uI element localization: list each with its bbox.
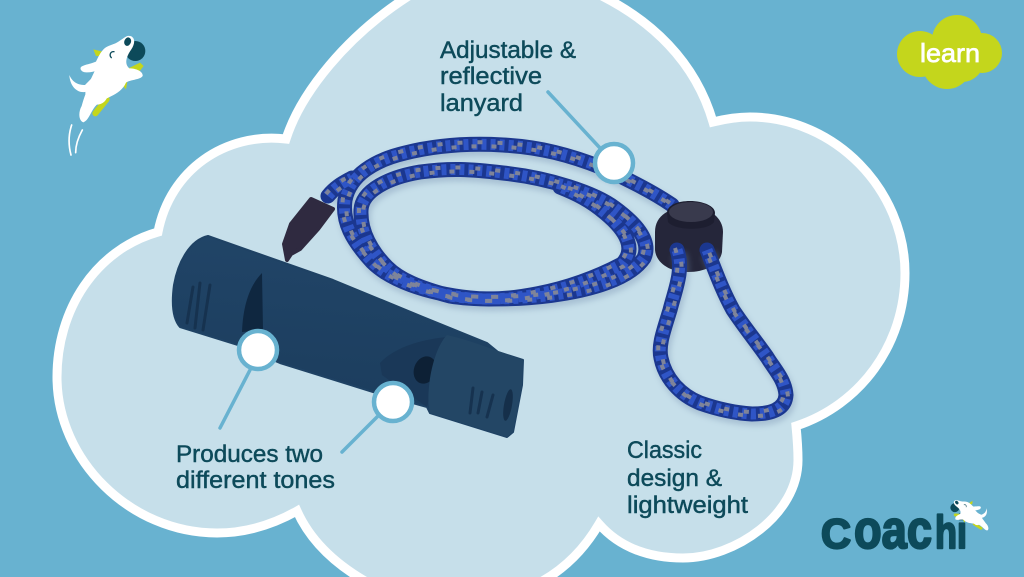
whistle end opening <box>501 389 515 421</box>
text: adjustable lanyard: lanyard <box>440 90 523 117</box>
lanyard loop <box>658 248 788 418</box>
badge: learn <box>897 15 1002 89</box>
cord stopper <box>284 199 333 260</box>
callout: tone line one <box>220 370 250 428</box>
logo: Coachi: C <box>821 510 851 557</box>
callout: tone dot two <box>374 383 412 421</box>
callout: tone dot one <box>239 331 277 369</box>
whistle mouth <box>380 337 447 407</box>
whistle hole <box>410 353 440 387</box>
text: classic design <box>627 437 748 519</box>
logo: Coachi: oac <box>854 500 932 560</box>
whistle <box>173 236 523 437</box>
text: adjustable lanyard <box>440 37 576 117</box>
whistle end piece <box>428 335 523 437</box>
slider toggle <box>655 201 723 272</box>
text: classic design: Classic <box>627 437 702 464</box>
callout: lanyard line <box>548 92 600 148</box>
icon: logo dog <box>948 492 993 539</box>
callout: lanyard dot <box>595 144 633 182</box>
lanyard <box>326 142 674 303</box>
badge: learn: learn <box>920 38 980 68</box>
whistle notch <box>242 273 263 332</box>
text: two tones: Produces two <box>176 441 323 468</box>
whistle grooves <box>187 283 493 417</box>
text: adjustable lanyard: Adjustable & <box>440 37 576 64</box>
icon: jumping dog <box>69 36 145 155</box>
text: classic design: design & <box>627 465 722 492</box>
text: classic design: lightweight <box>627 492 748 519</box>
logo: Coachi: hi <box>935 506 967 558</box>
logo: Coachi <box>821 492 993 560</box>
text: two tones: different tones <box>176 467 335 494</box>
callout: tone line two <box>342 416 378 452</box>
text: adjustable lanyard: reflective <box>440 63 542 90</box>
text: two tones <box>176 441 335 494</box>
